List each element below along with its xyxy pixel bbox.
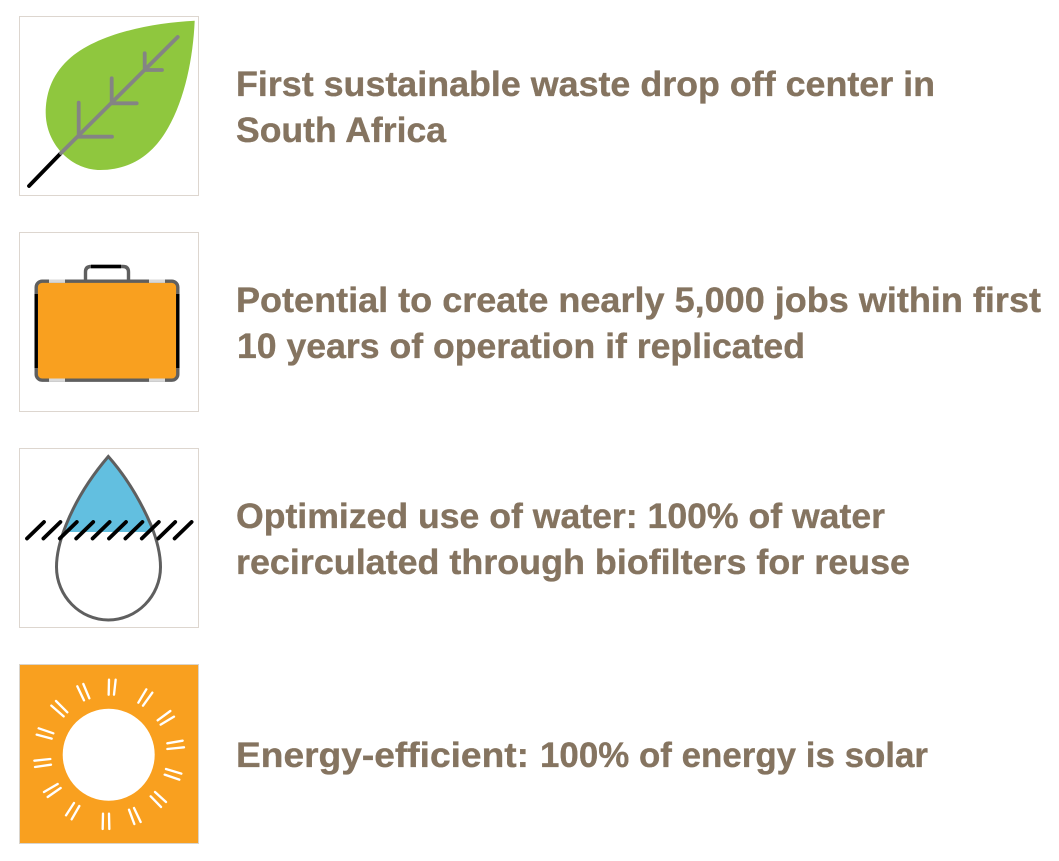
- panel: leaf item: [20, 16, 935, 196]
- panel: water item: [20, 448, 910, 628]
- text: energy efficient: [236, 736, 928, 775]
- panel: energy item: [20, 664, 928, 844]
- text: jobs potential: Potential to create nearly 5,000 jobs within first: [236, 281, 1041, 320]
- text: jobs potential: 10 years of operation if replicated: [237, 327, 805, 366]
- text: first sustainable center: South Africa: [236, 111, 447, 150]
- text: jobs potential: [236, 281, 1041, 366]
- icon: water drop: [20, 448, 198, 628]
- text: energy efficient: 100% of energy is solar: [540, 736, 928, 775]
- icon: sun: [20, 664, 198, 844]
- icon: briefcase: [20, 232, 198, 412]
- text: optimized water use: recirculated through biofilters for reuse: [236, 543, 910, 582]
- text: optimized water use: Optimized use of water: 100% of water: [236, 497, 885, 536]
- text: energy efficient: Energy-efficient:: [236, 736, 529, 775]
- text: first sustainable center: First sustainable waste drop off center in: [236, 65, 935, 104]
- icon: leaf: [20, 16, 198, 196]
- text: optimized water use: [236, 497, 910, 582]
- panel: jobs item: [20, 232, 1041, 412]
- text: first sustainable center: [236, 65, 935, 150]
